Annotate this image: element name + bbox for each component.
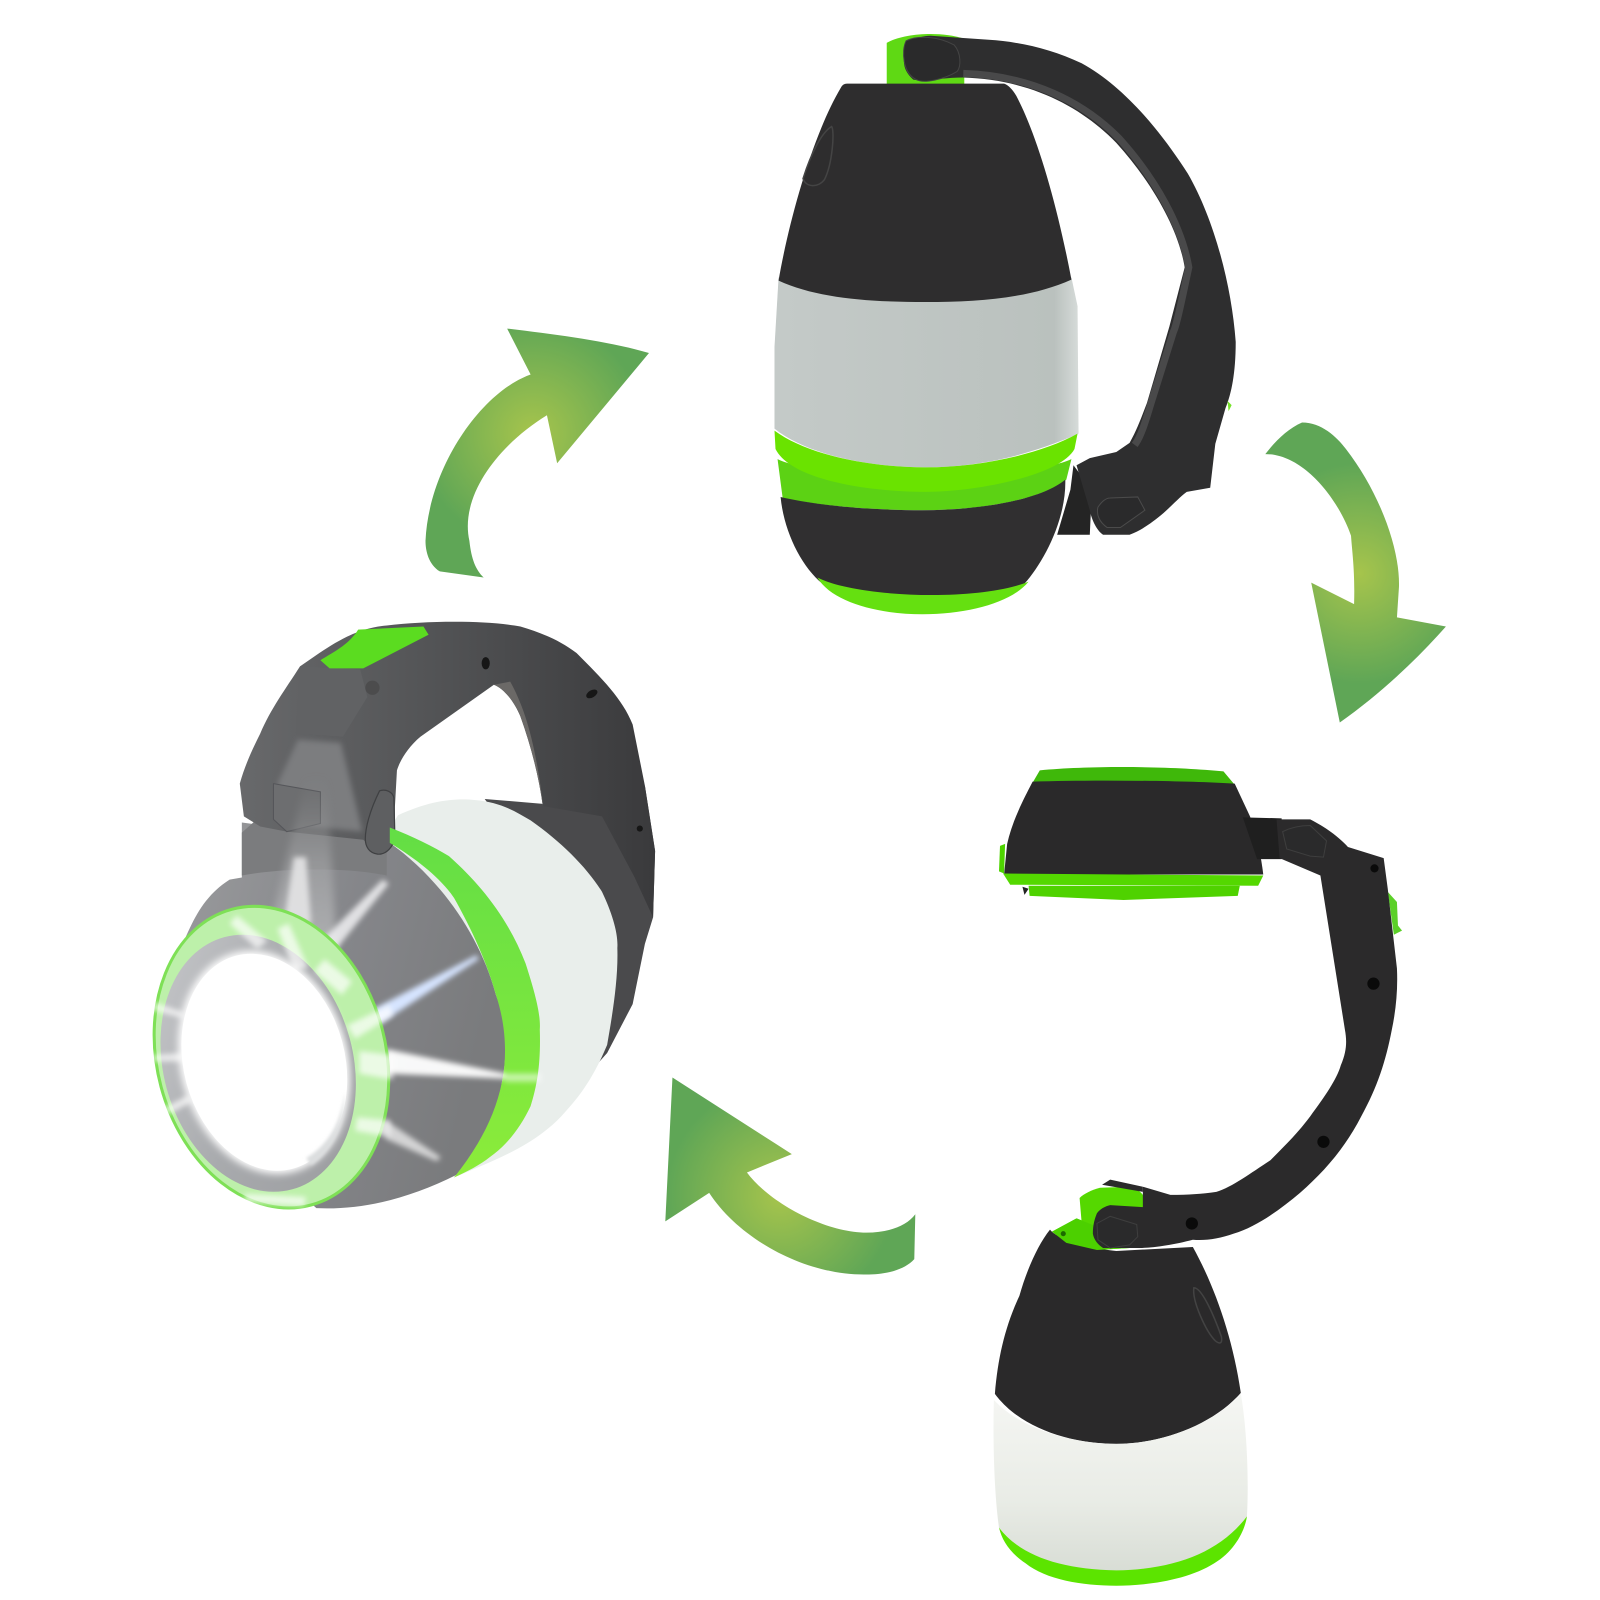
green hanging clip [887,34,964,86]
lens [158,935,371,1190]
base green rim [817,578,1029,614]
upper pivot cap [1283,826,1327,857]
lens window [774,278,1079,467]
lens glow [154,931,374,1193]
handle inner strip [963,73,1189,445]
inner metal ring [133,913,384,1214]
green pivot [1080,1187,1147,1240]
cap top green disc [1052,1218,1147,1250]
gray front body [180,822,505,1208]
pivot cap [365,790,395,854]
base block [242,816,387,876]
lantern: flashlight mode, lit [121,622,655,1235]
lamp head dome [1004,781,1263,874]
arm top sliver [1102,1180,1143,1192]
lens reflector shade [306,1092,345,1165]
switch mount [365,681,380,695]
cap green holes [1061,1231,1066,1236]
head green plate [1029,886,1240,900]
bracket [1057,465,1092,535]
green edge nub [1228,401,1232,411]
arm holes [1186,864,1380,1230]
handle holes [482,657,643,832]
light column on hinge [278,740,362,832]
arrow: flashlight to top lantern [426,329,649,578]
lamp shade [994,1394,1248,1571]
base green rim [999,1516,1247,1586]
handle inner lighter strip [494,682,543,806]
handle [240,622,655,917]
cap green re-draw over cap [1052,1218,1147,1250]
arrow: hanging lamp to flashlight [665,1078,915,1275]
slider block [296,666,367,737]
small dark clip [1022,887,1029,895]
cap [779,84,1071,302]
lower body [781,480,1065,597]
lantern: top, with folded handle [774,34,1236,614]
green slider [320,627,429,668]
green slider nub [1388,892,1402,935]
lower green ring [778,459,1071,510]
lower pivot cap [1097,1216,1138,1248]
hinge notch [273,784,320,832]
arrow: top lantern to hanging lamp [1265,422,1446,722]
side button [803,127,833,186]
lantern: hanging lamp mode [994,767,1402,1586]
pivot cap bottom [1097,497,1145,528]
light rays on body [284,857,541,1161]
ring highlights [153,915,393,1206]
bracket [1243,817,1282,859]
side button [1194,1288,1222,1343]
arm [1093,819,1397,1248]
outer green ring [121,880,421,1235]
lamp cap [995,1230,1241,1444]
rear dark body [485,786,655,1082]
handle [904,36,1236,535]
white shade [390,799,617,1178]
green band [390,828,540,1178]
pivot cap top [904,37,960,81]
upper green band [774,431,1078,492]
head green band [1003,873,1263,886]
left clip [999,844,1005,873]
ray column up into hinge [265,776,337,949]
lamp head top green [1033,767,1235,785]
